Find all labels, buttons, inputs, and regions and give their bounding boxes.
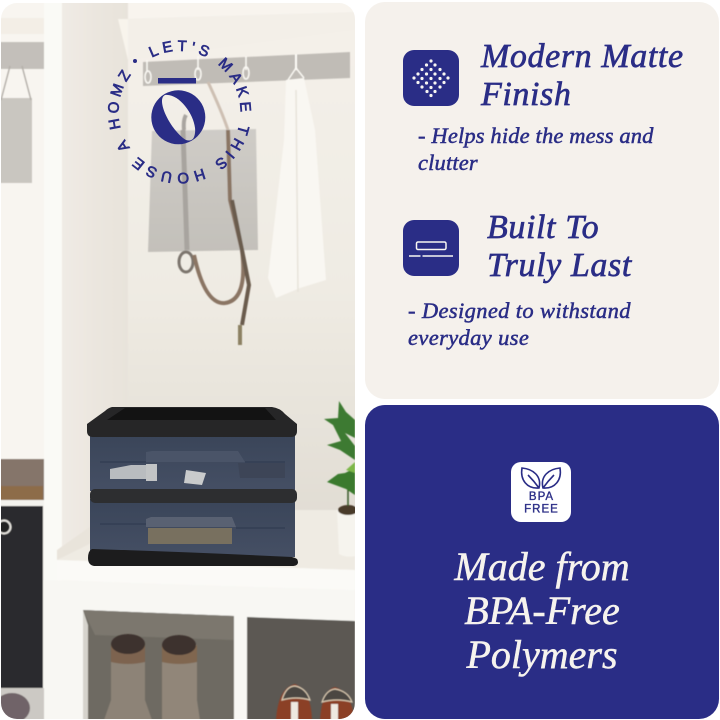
heading: made from bpa-free polymers [454,544,630,677]
two-drawer black storage unit [87,407,298,566]
logo ring [151,90,205,144]
upper drawer [90,435,295,491]
room background [0,0,360,720]
heading: modern matte finish [480,38,684,113]
lower drawer [90,499,295,557]
heading: built to truly last: Truly Last [487,247,632,284]
heading: built to truly last: Built To [487,209,599,246]
text: everyday use: - Designed to withstand [408,298,631,323]
badge text: LET'S MAKE THIS HOUSE A HOMZ [108,40,252,184]
top frame [87,407,297,437]
heading: modern matte finish: Modern Matte [481,38,684,75]
heading: made from bpa-free polymers: BPA-Free [464,588,620,633]
text: everyday use: everyday use [408,325,529,350]
mid frame [90,489,297,503]
hanging bag with strap [148,82,258,345]
boots and shoes [104,634,354,720]
text: everyday use [408,298,631,350]
icon: bpa free badge: FREE [524,504,559,516]
logo: circular brand badge [108,40,252,184]
text: hides mess: clutter [418,150,478,175]
icon: bpa free badge [511,462,571,522]
bottom frame [88,549,298,566]
panel: room photo [1,3,355,719]
heading: modern matte finish: Finish [481,76,572,113]
white towel on hook [268,54,326,298]
white shelf and cubby [44,500,355,720]
icon: matte finish dots [403,50,459,106]
text: hides mess [418,123,654,175]
heading: made from bpa-free polymers: Made from [454,544,630,589]
badge dot [133,59,137,63]
icon: bpa free badge: BPA [529,491,554,503]
logo bar [158,78,196,84]
heading: built to truly last [486,209,632,284]
icon: durable layer [403,220,459,276]
text: hides mess: - Helps hide the mess and [418,123,654,148]
panel: features [365,2,719,399]
coat rail with hooks [143,52,350,86]
plant in white pot [324,401,358,557]
panel: bpa free [365,405,719,719]
heading: made from bpa-free polymers: Polymers [466,632,618,677]
